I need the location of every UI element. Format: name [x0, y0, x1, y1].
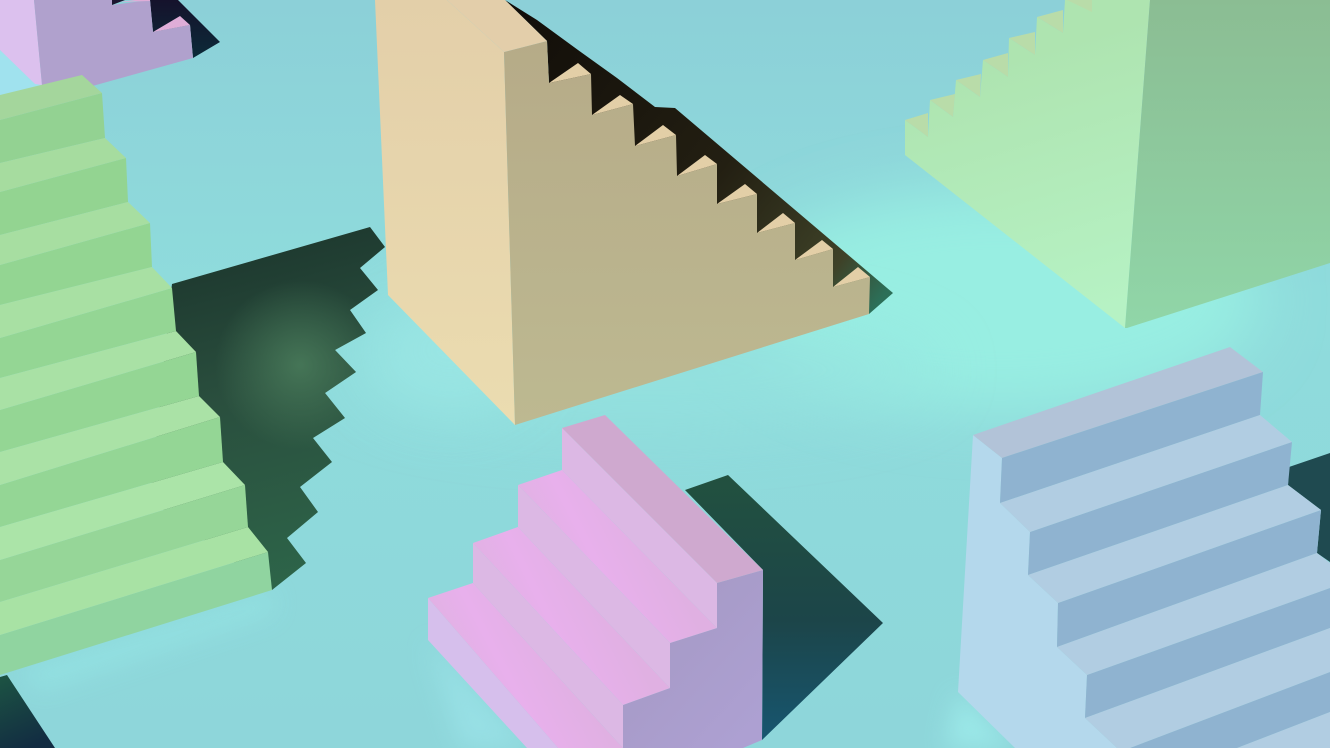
staircase: pink centre [428, 415, 883, 748]
left face: purple staircase [0, 0, 42, 85]
staircase: large green left [0, 75, 385, 748]
staircase: green top-right [905, 0, 1330, 328]
treads: pink staircase [428, 470, 717, 748]
shadow: green staircase [150, 227, 385, 590]
top tread: yellow staircase [447, 0, 547, 52]
staircase: purple top-left [0, 0, 220, 100]
risers: blue staircase [1000, 372, 1330, 748]
shadow: below green staircase [0, 675, 55, 748]
tread highlight small: purple staircase [120, 0, 150, 2]
tread highlight: purple staircase [153, 16, 190, 32]
shadow: yellow staircase [505, 0, 893, 314]
shadow: purple staircase [150, 0, 220, 58]
risers: pink staircase [428, 428, 717, 748]
tread highlights: yellow staircase [549, 63, 870, 287]
top tread: pink staircase [562, 415, 763, 583]
shadow: blue staircase [1288, 453, 1330, 562]
staircase: blue bottom-right [958, 347, 1330, 748]
treads: blue staircase [1000, 415, 1330, 748]
light stepped face: green block [905, 0, 1150, 328]
stepped face: yellow staircase [504, 41, 870, 425]
dark side face: green block [1125, 0, 1330, 328]
shadow: pink staircase [685, 475, 883, 740]
small notch: purple staircase [112, 0, 125, 5]
left face: yellow staircase [375, 0, 515, 425]
tread triangles: green block [905, 0, 1092, 137]
stepped face: purple staircase [34, 0, 193, 100]
top tread: blue staircase [973, 347, 1263, 458]
side face: blue staircase [958, 435, 1117, 748]
staircase: yellow block [375, 0, 893, 425]
side face: pink staircase [623, 570, 763, 748]
treads: green staircase [0, 75, 268, 635]
risers: green staircase [0, 93, 272, 675]
